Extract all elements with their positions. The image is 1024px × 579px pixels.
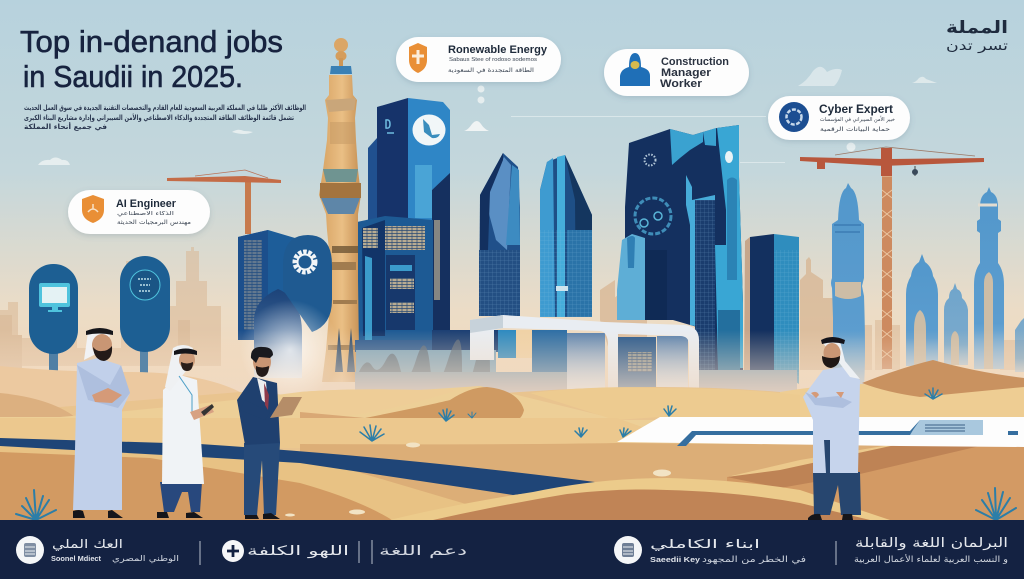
footer item: second emblem bbox=[614, 536, 806, 565]
desert shrubs bbox=[16, 388, 1016, 520]
icon: renewable emblem bbox=[412, 114, 446, 146]
callout: Cyber Expert: حماية البيانات الرقمية bbox=[820, 126, 890, 133]
intro paragraph: في جميع أنحاء المملكة bbox=[24, 122, 107, 131]
title: in Saudii in 2025. bbox=[23, 60, 243, 94]
callout: Renewable Energy: Ronewable Energy bbox=[448, 44, 548, 56]
tower: left blue tower bbox=[238, 230, 332, 378]
icon: gear bbox=[295, 252, 315, 272]
signpost 1 bbox=[29, 264, 78, 417]
white bridge structure bbox=[470, 315, 699, 393]
footer item: second emblem: في الخطر من المجهود bbox=[702, 555, 806, 565]
icon: orange cross shield bbox=[409, 43, 427, 73]
icon: orange shield bbox=[82, 195, 104, 223]
title: Top in-denand jobs bbox=[20, 25, 283, 59]
footer label: دعم اللغة bbox=[379, 544, 467, 559]
callout: Construction Manager Worker bbox=[604, 49, 749, 96]
signpost 2 bbox=[120, 256, 170, 414]
callout: Cyber Expert bbox=[768, 96, 910, 140]
icon: worker bbox=[620, 53, 650, 86]
distant tan skyline bbox=[0, 247, 1024, 370]
top-right Arabic logo bbox=[946, 18, 1009, 54]
footer item: right text bbox=[854, 536, 1008, 565]
callout: Construction Manager Worker: Manager bbox=[661, 67, 712, 79]
footer item: emblem with title: الوطني المصري bbox=[112, 554, 179, 563]
footer item: second emblem: Saeedii Key bbox=[650, 555, 701, 564]
callout: Renewable Energy: الطاقة المتجددة في السعودية bbox=[448, 67, 534, 74]
low podium bbox=[355, 330, 797, 394]
footer item: emblem with title: العك الملي bbox=[52, 537, 123, 551]
top-right Arabic logo: المملة bbox=[946, 18, 1008, 38]
intro paragraph: تشمل قائمة الوظائف الطاقة المتجددة والذكاء الاصطناعي والأمن السيبراني وإدارة مشاريع البناء الكبرى bbox=[24, 113, 294, 122]
icon: chain emblem bbox=[635, 198, 671, 234]
tower: right dark and blue block bbox=[744, 234, 799, 384]
tower: big navy tower with emblem bbox=[617, 125, 743, 370]
footer item: second emblem: ابناء الكاملي bbox=[650, 537, 760, 551]
callout: Cyber Expert: Cyber Expert bbox=[819, 102, 893, 116]
person: man in long coat on the right bbox=[803, 337, 861, 520]
title bbox=[20, 25, 283, 94]
callout: AI Engineer bbox=[68, 190, 210, 234]
footer item: plus icon with label bbox=[222, 540, 349, 562]
footer item: plus icon with label: اللهو الكلفة bbox=[247, 544, 349, 559]
callout: AI Engineer: مهندس البرمجيات الحديثة bbox=[117, 219, 191, 226]
callout: AI Engineer: الذكاء الاصطناعي bbox=[117, 210, 175, 217]
footer item: emblem with title bbox=[16, 536, 179, 564]
callout: Cyber Expert: خبير الأمن السيبراني في المؤسسات bbox=[820, 115, 895, 123]
person: man in thobe with crossed arms bbox=[73, 328, 130, 518]
icon: chain circle bbox=[779, 102, 809, 132]
intro paragraph: الوظائف الأكثر طلبا في المملكة العربية السعودية للعام القادم والتخصصات التقنية الجديدة في سوق العمل الحديث bbox=[24, 103, 306, 112]
ground mist bbox=[0, 300, 1024, 400]
right crane bbox=[800, 147, 984, 369]
left crane bbox=[167, 170, 281, 234]
tower: twin glass tower bbox=[540, 155, 592, 317]
callout: Construction Manager Worker: Construction bbox=[661, 56, 729, 68]
footer item: emblem with title: Soonel Mdiect bbox=[51, 556, 102, 563]
person: man in white coat with phone bbox=[157, 345, 214, 518]
footer item: right text: و النسب العربية لعلماء الأعمال العربية bbox=[854, 554, 1008, 565]
callout: Renewable Energy bbox=[396, 37, 561, 82]
desert dunes bbox=[0, 360, 1024, 520]
intro paragraph bbox=[24, 103, 306, 131]
tan minaret bbox=[319, 38, 361, 382]
tower: left glass tower bbox=[479, 153, 520, 316]
callout: AI Engineer: AI Engineer bbox=[116, 198, 177, 210]
tower: renewable energy skyscraper bbox=[357, 98, 450, 342]
foreground dunes bbox=[0, 435, 1024, 520]
top-right Arabic logo: تسر تدن bbox=[946, 39, 1009, 54]
road bbox=[0, 438, 610, 495]
clouds bbox=[38, 67, 937, 165]
footer band bbox=[0, 520, 1024, 579]
callout: Construction Manager Worker: Worker bbox=[660, 78, 703, 90]
footer item: right text: البرلمان اللغة والقابلة bbox=[855, 536, 1008, 551]
white plaza with blue stripe bbox=[617, 417, 1024, 447]
person: man in suit with tablet bbox=[237, 347, 302, 519]
mosque minarets on right bbox=[831, 183, 1024, 386]
callout: Renewable Energy: Sabaus Stee of rodoso sodemos bbox=[449, 57, 537, 63]
